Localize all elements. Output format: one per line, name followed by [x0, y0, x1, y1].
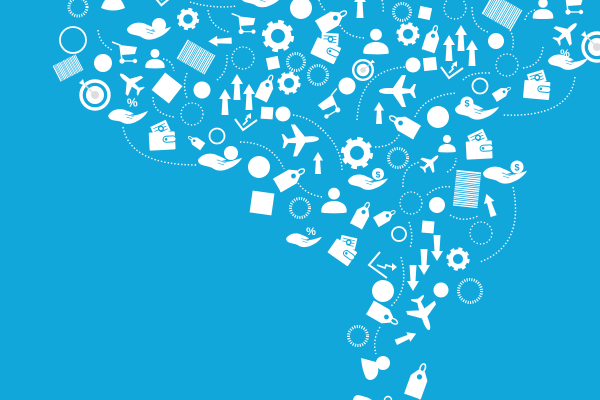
icon: percent hand right: %	[560, 48, 570, 60]
icon: bottom partial shape	[353, 395, 372, 400]
icon: plane small	[416, 149, 444, 177]
icon: percent hand left	[107, 95, 149, 125]
icon: tag lower	[366, 300, 401, 330]
dotted connector lines	[98, 0, 575, 354]
icon: bottom tag	[404, 361, 432, 400]
solid circles	[94, 0, 504, 302]
icon: wallet right	[523, 68, 553, 100]
icon: person small	[438, 135, 456, 152]
icon: vertical barcode	[453, 170, 481, 208]
rings and dotted circles	[60, 0, 518, 346]
icon: small barcode	[53, 54, 83, 82]
icon: rotated cart	[315, 88, 348, 120]
icon: tag right	[386, 110, 421, 140]
icon: chart right	[441, 61, 463, 78]
icon: tag center	[273, 163, 308, 193]
icon: large barcode	[177, 39, 215, 75]
icon: wallet center right	[465, 128, 494, 160]
squares	[152, 6, 437, 234]
icon: shopping cart left	[112, 42, 137, 64]
icon: person top right	[533, 0, 553, 19]
icon: wallet top center	[310, 26, 347, 65]
icon: person left	[145, 49, 165, 68]
icon: person center	[321, 188, 347, 213]
icon: gear	[178, 9, 198, 29]
icon: tilted arrow	[394, 329, 418, 347]
icon: percent hand lower	[286, 226, 322, 247]
icon: large gear center	[343, 139, 371, 167]
icon: down arrows group	[407, 235, 443, 291]
icon: gear lower right	[448, 249, 468, 269]
icon: up arrow tilted	[481, 192, 499, 218]
icon: tag vertical lower	[254, 72, 278, 103]
icon: tag vertical	[422, 24, 443, 53]
icon: chart rotated	[369, 252, 397, 278]
icon: percent hand right	[548, 48, 588, 70]
icon: dollar hand: $	[464, 98, 470, 108]
icon: left arrow	[208, 35, 232, 47]
icon: wallet lower	[327, 229, 365, 267]
icon: dollar hand right: $	[514, 162, 520, 172]
icon: dollar hand right	[483, 160, 527, 184]
icon: hand with ball	[127, 18, 171, 40]
icon: chart center left	[235, 113, 257, 130]
icon: plane center	[281, 123, 320, 157]
icon: target left	[79, 79, 109, 109]
icon: tag top	[315, 5, 350, 35]
icon: up arrow	[374, 102, 384, 124]
icon: target center	[352, 58, 375, 81]
icon: gear right	[398, 24, 418, 44]
icon: cart top right	[558, 0, 583, 15]
icon: large gear	[264, 22, 292, 50]
icon: arrows up right group	[443, 25, 478, 66]
icon: target far right	[581, 31, 600, 61]
icon: percent hand lower: %	[306, 226, 316, 238]
icon: tag vertical center	[350, 199, 375, 230]
icon: dollar hand	[455, 96, 499, 120]
icon: tag small right	[492, 84, 513, 102]
icon: hand top	[241, 0, 283, 7]
icon: arrows up group	[219, 74, 255, 115]
icon: gear lower	[279, 73, 299, 93]
icon: plane top right	[548, 15, 585, 51]
icon: barcode top right	[482, 0, 522, 30]
icon: plane right of center	[379, 75, 416, 107]
icon: bottom partial tag ring	[384, 396, 392, 400]
icon: small tag	[186, 133, 205, 150]
icon: up arrow top	[354, 0, 366, 18]
icon: wallet lower left	[148, 119, 177, 151]
icon: rotated person	[361, 356, 390, 380]
icon: percent hand left: %	[126, 95, 138, 110]
icon: top person	[101, 0, 125, 10]
icon: dollar hand center	[348, 168, 388, 190]
icon: hand with ball center	[198, 146, 242, 171]
icon: tag small center	[373, 206, 398, 227]
icon: shopping cart upper	[232, 14, 256, 34]
icon: top chart	[152, 0, 175, 6]
icon: plane left	[112, 65, 149, 101]
icon: up arrow center	[313, 152, 323, 174]
icon: dollar hand center: $	[376, 170, 381, 180]
icon: plane lower	[403, 292, 443, 335]
icon: person top center	[363, 29, 389, 54]
